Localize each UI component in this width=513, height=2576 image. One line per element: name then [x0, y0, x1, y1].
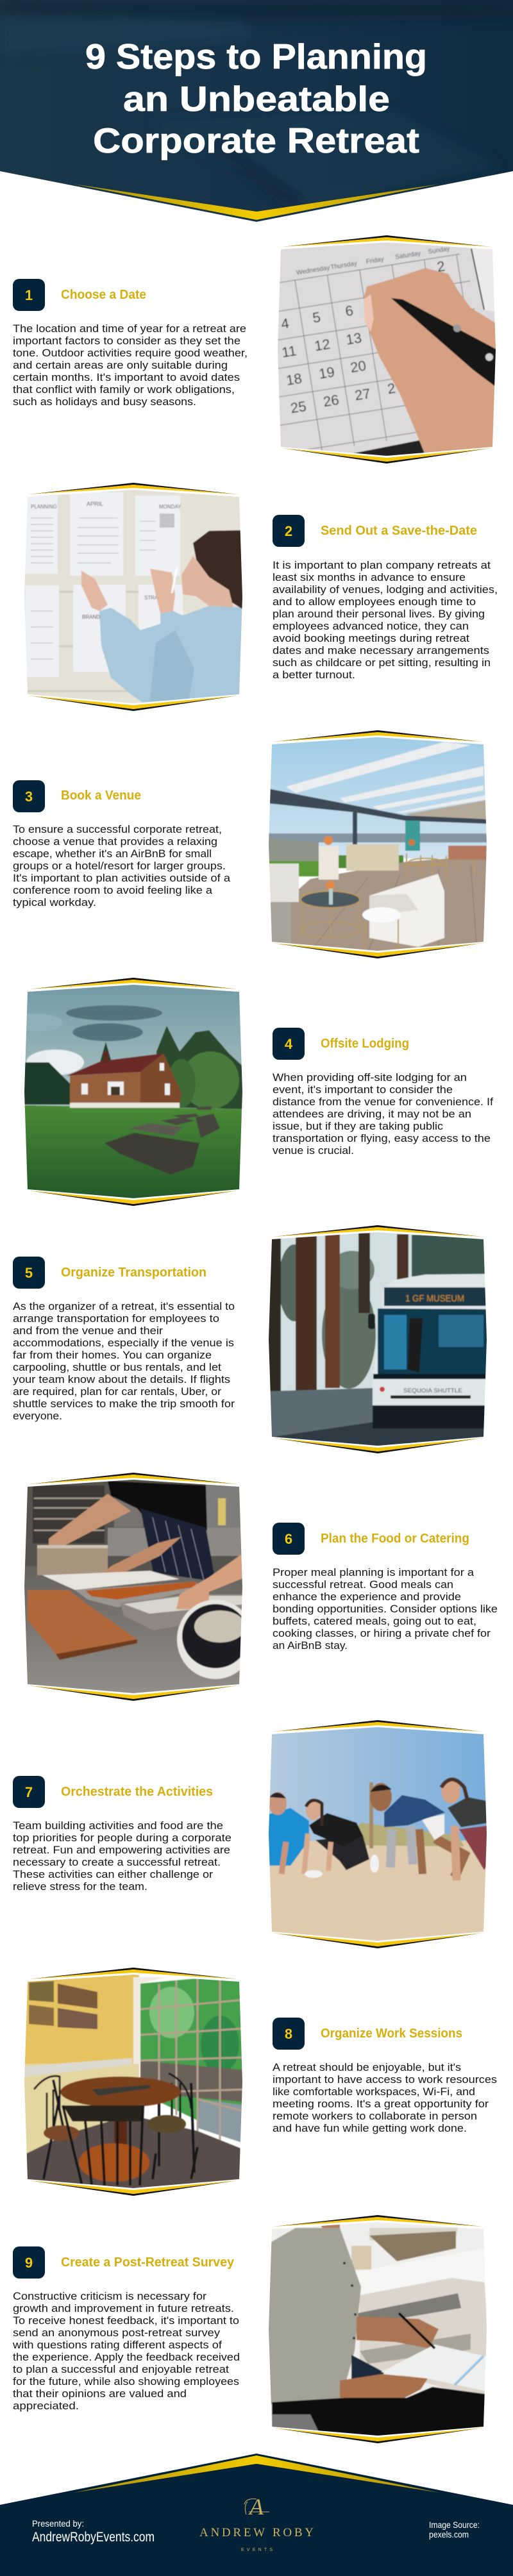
- image source credit: Image Source:: [429, 2520, 480, 2530]
- photo: hand writing on calendar: 2: [386, 380, 396, 397]
- photo: woman at wall planner: APRIL: [87, 501, 103, 507]
- step 9 text: [12, 2291, 240, 2412]
- step 2 text: availability of venues, lodging and activities,: [273, 584, 498, 596]
- title: Corporate Retreat: [93, 121, 419, 160]
- step 6 text: bonding opportunities. Consider options like: [273, 1603, 498, 1615]
- photo: hand writing on calendar: Saturday: [395, 250, 421, 261]
- photo: woman at wall planner: MONDAY: [159, 504, 181, 510]
- photo: woman filling in a survey: [268, 2215, 490, 2443]
- presented by credit: [32, 2518, 155, 2545]
- step 6 text: an AirBnB stay.: [273, 1640, 348, 1652]
- photo: woman at wall planner: PLANNING: [31, 504, 57, 510]
- photo: lodge with picnic tables: [12, 978, 246, 1206]
- step 7 text: Team building activities and food are the: [13, 1820, 223, 1832]
- step 5 heading: Organize Transportation: [61, 1266, 206, 1280]
- photo: rooftop venue: [268, 730, 490, 958]
- photo: hand writing on calendar: 26: [322, 392, 340, 410]
- photo: hand writing on calendar: 27: [353, 385, 371, 403]
- step 4 heading: Offsite Lodging: [321, 1037, 409, 1051]
- photo: hand writing on calendar: 20: [349, 357, 367, 376]
- photo: hand writing on calendar: 12: [314, 336, 332, 354]
- step 2 text: dates and make necessary arrangements: [273, 645, 489, 657]
- step 2 text: plan around their personal lives. By giving: [273, 608, 485, 620]
- step 9 text: To receive honest feedback, it's important to: [13, 2315, 239, 2327]
- photo: hand writing on calendar: Friday: [366, 256, 384, 265]
- step 8 text: meeting rooms. It's a great opportunity for: [273, 2098, 489, 2110]
- step 2 text: least six months in advance to ensure: [273, 572, 466, 583]
- step 6 text: Proper meal planning is important for a: [273, 1567, 475, 1578]
- panel: step 8 organize work sessions: [24, 1968, 497, 2196]
- step 9 text: appreciated.: [13, 2400, 79, 2412]
- step 4 text: issue, but if they are taking public: [273, 1121, 443, 1132]
- step 2 text: employees advanced notice, they can: [273, 621, 469, 632]
- title: an Unbeatable: [123, 79, 390, 119]
- step 7 badge: 7: [25, 1784, 33, 1800]
- step 9 text: for the future, while also showing employees: [13, 2376, 239, 2388]
- step 1 text: certain months. It's important to avoid dates: [13, 372, 240, 383]
- step 2 badge: 2: [285, 523, 292, 539]
- photo: dining nook with window: [24, 1968, 246, 2196]
- step 2 text: and to allow employees enough time to: [273, 596, 476, 608]
- step 1 text: important factors to consider as they set the: [13, 335, 240, 347]
- step 5 text: As the organizer of a retreat, it's essential to: [13, 1301, 235, 1312]
- panel: step 5 organize transportation: [13, 1225, 490, 1453]
- step 3 text: conference room to avoid feeling like a: [13, 885, 213, 896]
- step 5 text: shuttle services to make the trip smooth for: [13, 1398, 235, 1410]
- step 3 text: [13, 824, 231, 908]
- step 2 text: It is important to plan company retreats at: [273, 560, 491, 571]
- photo: woman at wall planner: [24, 483, 246, 711]
- step 3 text: groups or a hotel/resort for larger groups.: [13, 860, 226, 872]
- panel: step 3 book a venue: [13, 730, 490, 958]
- presented by credit: AndrewRobyEvents.com: [32, 2530, 155, 2545]
- step 5 badge: 5: [25, 1265, 33, 1281]
- step 2 text: avoid booking meetings during retreat: [273, 633, 469, 644]
- step 5 badge: [13, 1257, 45, 1289]
- step 6 badge: [273, 1523, 305, 1555]
- step 1 text: tone. Outdoor activities require good weather,: [13, 347, 248, 359]
- step 4 text: distance from the venue for convenience. If: [273, 1096, 493, 1108]
- step 3 text: escape, whether it's an AirBnB for small: [13, 848, 212, 860]
- step 9 badge: [13, 2246, 45, 2279]
- step 3 heading: Book a Venue: [61, 789, 141, 803]
- step 1 text: such as holidays and busy seasons.: [13, 396, 196, 408]
- step 9 heading: Create a Post-Retreat Survey: [61, 2255, 235, 2270]
- step 3 text: typical workday.: [13, 897, 96, 908]
- photo: hand writing on calendar: Thursday: [330, 260, 358, 271]
- step 5 text: accommodations, especially if the venue is: [13, 1337, 234, 1349]
- step 7 badge: [13, 1776, 45, 1808]
- step 5 text: arrange transportation for employees to: [13, 1313, 219, 1325]
- step 9 text: growth and improvement in future retreats.: [13, 2303, 234, 2314]
- photo: woman at wall planner: BRANDI: [82, 614, 101, 620]
- step 2 text: a better turnout.: [273, 669, 355, 681]
- panel: step 7 orchestrate activities: [13, 1720, 490, 1948]
- step 1 badge: 1: [25, 287, 33, 303]
- footer banner: [0, 2454, 513, 2576]
- step 8 text: A retreat should be enjoyable, but it's: [273, 2062, 461, 2073]
- photo: hand writing on calendar: 11: [280, 342, 298, 360]
- step 5 text: are required, plan for car rentals, Uber, or: [13, 1386, 222, 1398]
- step 8 text: [273, 2062, 497, 2134]
- step 6 text: buffets, catered meals, going out to eat,: [273, 1616, 476, 1627]
- photo: team on the beach: [268, 1720, 490, 1948]
- panel: step 2 save the date: [24, 483, 498, 711]
- step 4 text: attendees are driving, it may not be an: [273, 1108, 471, 1120]
- logo: Andrew Roby Events: EVENTS: [241, 2548, 273, 2552]
- step 6 text: cooking classes, or hiring a private chef for: [273, 1628, 491, 1639]
- panel: step 1 choose a date: [13, 235, 499, 464]
- photo: hand writing on calendar: 19: [317, 364, 336, 382]
- title: 9 Steps to Planning: [85, 37, 427, 76]
- step 7 text: [13, 1820, 231, 1893]
- step 1 text: and certain areas are only suitable during: [13, 360, 228, 371]
- step 6 text: enhance the experience and provide: [273, 1591, 461, 1603]
- step 6 text: successful retreat. Good meals can: [273, 1579, 453, 1591]
- step 6 text: [273, 1567, 498, 1652]
- step 5 text: [13, 1301, 235, 1422]
- photo: hand writing on calendar: 6: [344, 303, 355, 319]
- step 9 badge: 9: [25, 2255, 33, 2271]
- step 1 badge: [13, 279, 45, 311]
- step 4 text: venue is crucial.: [273, 1145, 354, 1157]
- step 2 text: [273, 560, 498, 681]
- step 5 text: your team know about the details. If flights: [13, 1374, 230, 1385]
- step 7 text: retreat. Fun and empowering activities are: [13, 1844, 230, 1856]
- photo: chefs preparing food: [24, 1473, 254, 1701]
- photo: hand writing on calendar: 5: [312, 309, 322, 326]
- step 7 heading: Orchestrate the Activities: [61, 1785, 213, 1799]
- step 1 heading: Choose a Date: [61, 288, 146, 302]
- step 8 text: like comfortable workspaces, Wi-Fi, and: [273, 2086, 475, 2098]
- logo: Andrew Roby Events: A: [248, 2494, 264, 2520]
- photo: hand writing on calendar: 13: [345, 330, 363, 348]
- step 9 text: Constructive criticism is necessary for: [13, 2291, 207, 2302]
- photo: hand writing on calendar: 2: [436, 258, 446, 275]
- step 2 heading: Send Out a Save-the-Date: [321, 524, 477, 538]
- image source credit: [429, 2520, 480, 2539]
- panel: step 6 plan the food: [24, 1473, 498, 1701]
- photo: hand writing on calendar: Wednesday: [296, 264, 330, 276]
- photo: hand writing on calendar: 4: [280, 315, 290, 332]
- step 8 text: important to have access to work resources: [273, 2074, 497, 2086]
- step 9 text: that their opinions are valued and: [13, 2388, 187, 2400]
- step 4 text: [273, 1072, 493, 1157]
- step 8 text: remote workers to collaborate in person: [273, 2111, 477, 2122]
- photo: shuttle bus among trees: SEQUOIA SHUTTLE: [403, 1387, 462, 1394]
- step 9 text: the experience. Apply the feedback received: [13, 2352, 240, 2363]
- step 5 text: everyone.: [13, 1410, 62, 1422]
- title: [85, 37, 427, 160]
- step 4 badge: [273, 1028, 305, 1060]
- step 3 text: To ensure a successful corporate retreat,: [13, 824, 222, 835]
- step 3 text: choose a venue that provides a relaxing: [13, 836, 217, 848]
- photo: hand writing on calendar: 18: [285, 370, 303, 389]
- logo: Andrew Roby Events: ANDREW ROBY: [199, 2526, 314, 2539]
- step 4 badge: 4: [285, 1036, 293, 1052]
- photo: hand writing on calendar: 25: [289, 398, 307, 416]
- step 7 text: relieve stress for the team.: [13, 1881, 147, 1893]
- step 6 badge: 6: [285, 1531, 292, 1547]
- step 1 text: The location and time of year for a retreat are: [13, 323, 246, 335]
- photo: hand writing on calendar: Sunday: [428, 246, 450, 256]
- step 1 text: [13, 323, 248, 408]
- step 5 text: carpooling, shuttle or bus rentals, and let: [13, 1362, 221, 1373]
- photo: woman at wall planner: STRATE: [144, 595, 164, 601]
- image source credit: pexels.com: [429, 2529, 469, 2539]
- step 5 text: far from their homes. You can organize: [13, 1350, 212, 1361]
- step 8 badge: [273, 2018, 305, 2050]
- step 4 text: transportation or flying, easy access to the: [273, 1133, 491, 1144]
- step 9 text: with questions rating different aspects of: [12, 2339, 222, 2351]
- step 3 badge: 3: [25, 789, 33, 805]
- presented by credit: Presented by:: [32, 2518, 84, 2529]
- step 2 text: such as childcare or pet sitting, resulting in: [273, 657, 491, 669]
- step 2 badge: [273, 515, 305, 547]
- header banner: [0, 0, 513, 222]
- step 3 text: It's important to plan activities outside of a: [13, 873, 231, 884]
- photo: shuttle bus among trees: [268, 1225, 490, 1453]
- step 4 text: event, it's important to consider the: [273, 1084, 453, 1096]
- step 8 text: and have fun while getting work done.: [273, 2123, 467, 2134]
- step 3 badge: [13, 780, 45, 812]
- step 7 text: These activities can either challenge or: [13, 1869, 214, 1880]
- step 9 text: to plan a successful and enjoyable retreat: [13, 2364, 229, 2375]
- step 5 text: and from the venue and their: [13, 1325, 164, 1337]
- photo: hand writing on calendar: [257, 235, 499, 464]
- step 1 text: that conflict with family or work obligations,: [13, 384, 235, 396]
- panel: step 9 post-retreat survey: [12, 2215, 490, 2443]
- step 4 text: When providing off-site lodging for an: [273, 1072, 467, 1083]
- step 7 text: necessary to create a successful retreat.: [13, 1857, 221, 1868]
- logo: Andrew Roby Events: [199, 2494, 314, 2552]
- step 6 heading: Plan the Food or Catering: [321, 1532, 469, 1546]
- step 8 badge: 8: [285, 2026, 292, 2042]
- step 8 heading: Organize Work Sessions: [321, 2027, 462, 2041]
- photo: shuttle bus among trees: 1 GF MUSEUM: [405, 1293, 464, 1304]
- step 9 text: send an anonymous post-retreat survey: [13, 2327, 221, 2339]
- panel: step 4 offsite lodging: [12, 978, 493, 1206]
- step 7 text: top priorities for people during a corporate: [13, 1832, 231, 1844]
